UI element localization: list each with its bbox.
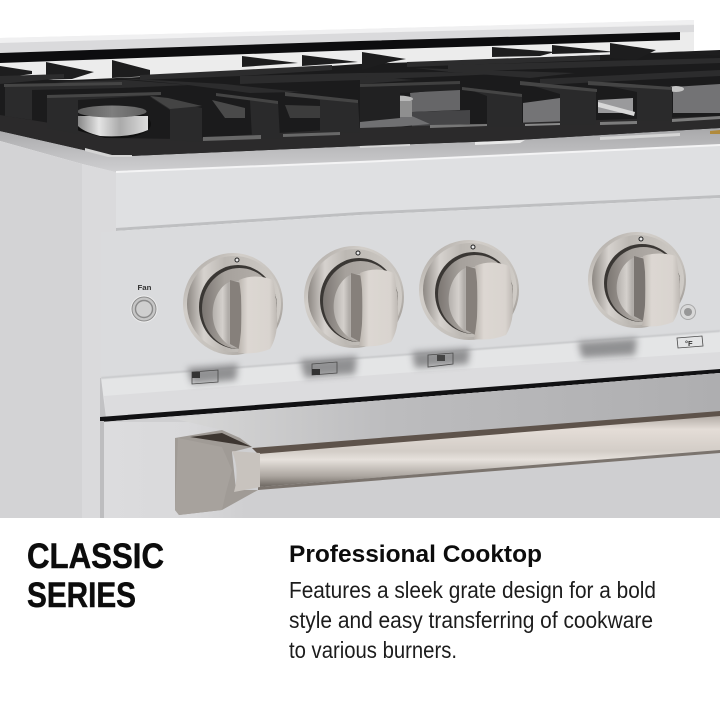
rear grate fingers [0,43,720,79]
knob shadows [187,338,637,384]
knob 2 [304,246,404,348]
grate and burners [0,43,720,157]
series title [27,537,164,615]
burner: front left [75,106,151,139]
handle collar [232,451,260,492]
side panel [0,141,82,518]
corner column [82,164,116,518]
control panel [101,198,720,378]
oven door [100,373,720,518]
burner label 3 [428,353,453,367]
knob 4 [588,232,686,328]
feature description: to various burners. [289,637,457,663]
well [0,50,720,156]
handle reflection [171,373,720,449]
knob 1 [183,253,283,355]
upper front panel [116,145,720,229]
feature description: style and easy transferring of cookware [289,607,653,633]
fan button [130,285,158,322]
photo: range [0,20,720,518]
door handle [175,411,720,515]
middle grate bars [0,55,720,93]
burner wells [410,88,460,112]
burner label 1 [192,370,218,384]
trim glints [85,130,720,157]
white text band [0,518,720,720]
backguard [0,20,694,100]
feature description: Features a sleek grate design for a bold [289,577,656,603]
temperature indicator light [680,304,696,320]
temperature label: °F [685,339,693,348]
knob labels [192,336,703,384]
series title: CLASSIC [27,537,164,576]
burner label 2 [312,362,337,375]
knob 3 [419,240,519,340]
burner: rear highlights [382,86,684,117]
handle bar [258,415,720,487]
control lip [101,331,720,420]
feature heading: Professional Cooktop [289,541,542,568]
cooktop surface [0,100,720,172]
dark gap under lip [100,369,720,422]
series title: SERIES [27,576,136,615]
fan label: Fan [138,285,152,292]
temperature label [677,336,703,348]
feature description [289,577,656,663]
handle bracket [175,430,258,515]
front grate frame [0,81,720,156]
